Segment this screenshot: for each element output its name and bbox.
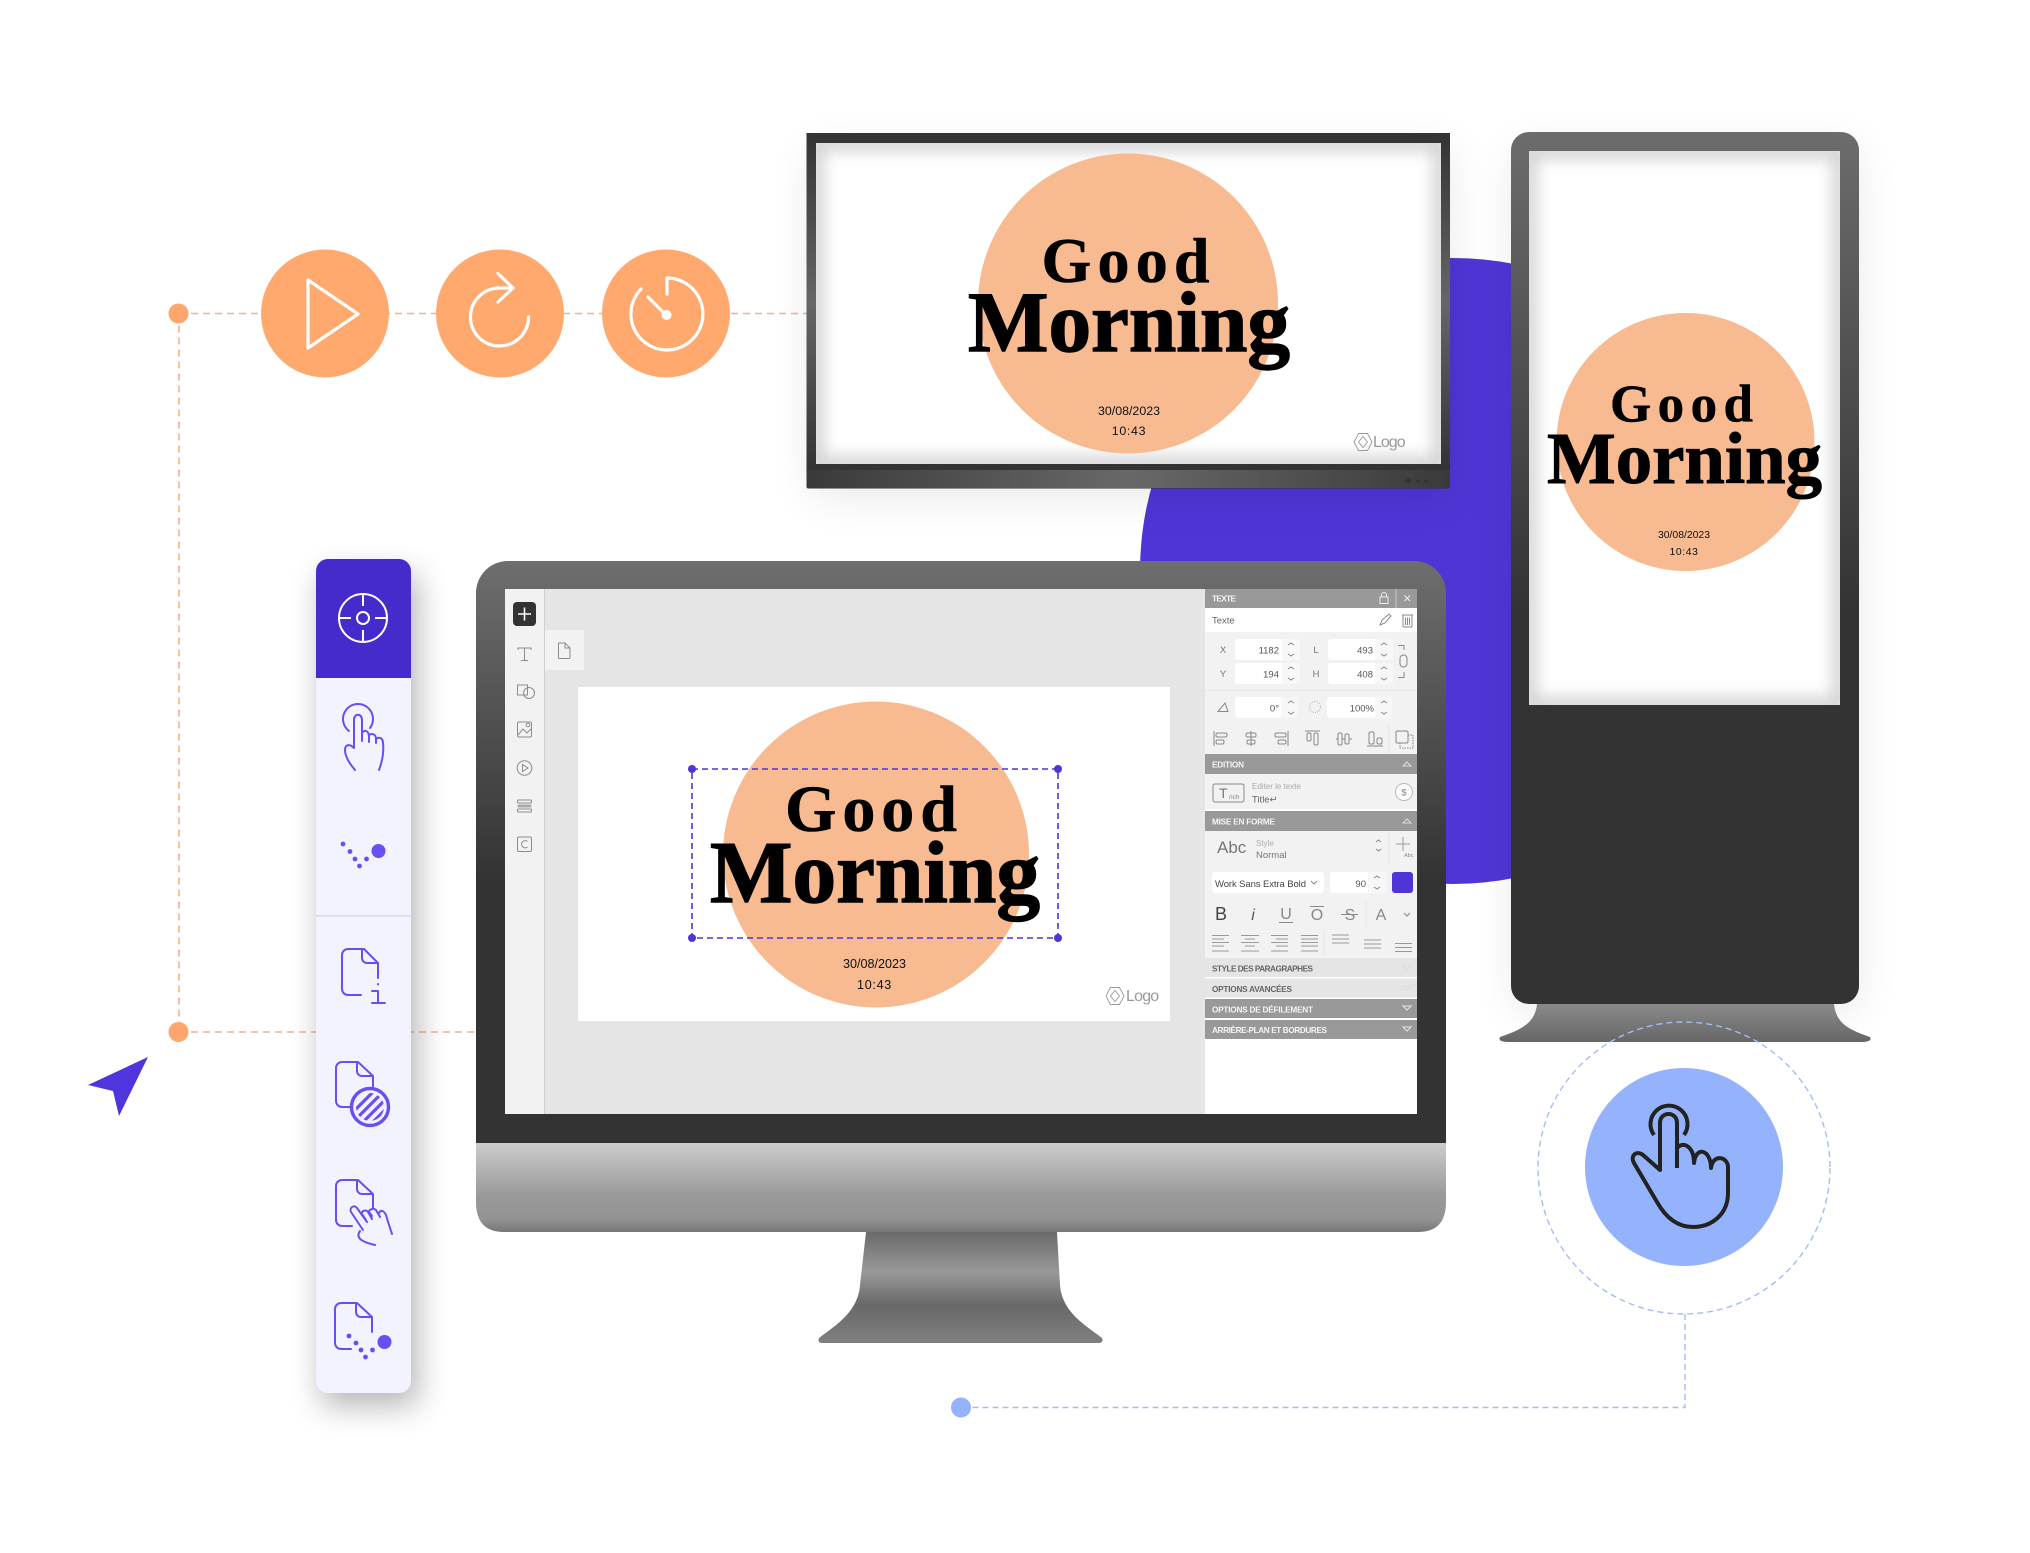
icon: touch hand (343, 704, 383, 770)
page tab (545, 630, 584, 670)
row: edit text: Title↵ (1252, 794, 1278, 806)
selection box (688, 765, 1062, 942)
monitor stand (818, 1232, 1102, 1343)
purple background circle (1140, 258, 1766, 884)
row: edit text: Editer le texte (1252, 782, 1301, 791)
kiosk headline: Morning (1547, 418, 1822, 499)
kiosk date and time (1658, 530, 1710, 558)
tv date and time: 30/08/2023 (1098, 404, 1160, 418)
sidebar panel (316, 678, 411, 1393)
tool: layers (518, 800, 532, 812)
kiosk date and time: 10:43 (1669, 547, 1699, 558)
row: edit text: rich (1229, 794, 1240, 801)
kiosk date and time: 30/08/2023 (1658, 530, 1710, 541)
row: character style: A (1376, 907, 1387, 924)
canvas logo (1106, 988, 1159, 1005)
fields: position and size (1220, 639, 1407, 684)
canvas headline (710, 773, 1040, 922)
collapsed section: options de defilement: OPTIONS DE DÉFILEMENT (1212, 1004, 1313, 1014)
shadow: devices (812, 150, 1856, 1010)
tv peach circle (978, 154, 1278, 454)
canvas headline: Good (785, 773, 957, 846)
connector dots: orange (168, 304, 188, 1042)
fields: position and size: 1182 (1259, 646, 1279, 656)
collapsed section: options de defilement (1205, 999, 1417, 1018)
monitor bezel (476, 561, 1446, 1143)
icon: file hatched (336, 1062, 390, 1126)
tool sidebar (316, 559, 411, 1393)
header: texte (1205, 589, 1417, 608)
shadow: sidebar (322, 575, 417, 1405)
row: edit text (1213, 782, 1412, 806)
tv date and time: 10:43 (1112, 424, 1146, 438)
connector: orange dashed lines (179, 314, 807, 1032)
sidebar active tab (316, 559, 411, 678)
row: font selector: Work Sans Extra Bold (1215, 879, 1306, 890)
canvas date and time (843, 957, 906, 992)
icon: motion dots (341, 842, 386, 868)
header: edition (1205, 754, 1417, 774)
divider (316, 915, 411, 916)
row: character style: B (1215, 904, 1227, 924)
row: alignment tools (1214, 724, 1413, 754)
fields: position and size: L (1313, 645, 1319, 656)
icon: repeat in orange circle (436, 250, 564, 378)
kiosk headline: Good (1610, 376, 1753, 434)
kiosk headline (1547, 376, 1822, 499)
row: character style: O (1311, 907, 1323, 924)
canvas headline: Morning (710, 825, 1040, 922)
row: font selector (1212, 872, 1413, 893)
row: character style: S (1345, 907, 1355, 924)
landscape wall screen (806, 133, 1450, 488)
kiosk peach circle (1556, 313, 1814, 571)
properties panel (1205, 589, 1417, 1114)
kiosk base (1499, 1004, 1871, 1042)
tool: counter (518, 837, 532, 852)
tv frame (806, 133, 1450, 470)
slide canvas (578, 687, 1170, 1021)
collapsed section: options avancees (1205, 978, 1417, 998)
fields: position and size: 493 (1357, 646, 1373, 656)
monitor silver chin (476, 1142, 1446, 1232)
monitor screen (505, 589, 1417, 1114)
collapsed section: arriere-plan et bordures: ARRIÈRE-PLAN ET BORDURES (1212, 1025, 1328, 1035)
row: style selector: Normal (1256, 850, 1287, 861)
collapsed section: options avancees: OPTIONS AVANCÉES (1212, 984, 1293, 994)
tool: add button (513, 602, 536, 626)
row: texte name: Texte (1212, 616, 1235, 626)
canvas date and time: 30/08/2023 (843, 957, 906, 971)
row: character style: U (1280, 906, 1292, 923)
row: character style: i (1251, 907, 1255, 924)
row: character style (1215, 900, 1410, 928)
tool: shapes (518, 685, 534, 698)
icon: blue touch hand (1585, 1068, 1783, 1266)
monitor lower black band (476, 1114, 1446, 1142)
header: texte: TEXTE (1212, 594, 1237, 604)
fields: rotation and opacity: 0° (1270, 704, 1279, 714)
fields: position and size: 408 (1357, 670, 1373, 680)
tv lower bar (806, 464, 1450, 488)
row: font selector: 90 (1355, 879, 1366, 890)
icon: target (339, 594, 387, 642)
collapsed section: arriere-plan et bordures (1205, 1020, 1417, 1039)
icon: file info (342, 949, 385, 1003)
connector dot: blue (951, 1398, 971, 1418)
collapsed section: style des paragraphes (1205, 958, 1417, 977)
icon: timer in orange circle (602, 250, 730, 378)
icon: file touch (336, 1180, 392, 1245)
kiosk body (1511, 132, 1859, 1004)
tv logo: Logo (1373, 434, 1406, 451)
left toolbar (505, 589, 545, 1114)
row: style selector (1217, 832, 1414, 864)
fields: rotation and opacity (1218, 697, 1392, 718)
fields: position and size: Y (1220, 669, 1227, 680)
fields: position and size: 194 (1263, 670, 1279, 680)
tv logo (1354, 434, 1406, 451)
row: style selector: Abc (1217, 838, 1247, 857)
tv headline (968, 225, 1290, 370)
icon: file motion (335, 1303, 392, 1359)
tv date and time (1098, 404, 1160, 438)
kiosk screen (1529, 151, 1840, 705)
row: style selector: Style (1256, 839, 1274, 848)
fields: rotation and opacity: 100% (1350, 704, 1375, 714)
header: edition: EDITION (1212, 760, 1244, 770)
fields: position and size: X (1220, 645, 1227, 656)
tv headline: Morning (968, 274, 1290, 370)
row: paragraph alignment (1212, 930, 1412, 956)
icon: play in orange circle (261, 250, 389, 378)
portrait kiosk totem (1499, 132, 1871, 1042)
connector: blue dashed ring and line (961, 1022, 1830, 1408)
header: mise en forme: MISE EN FORME (1212, 818, 1276, 826)
desktop monitor (476, 561, 1446, 1343)
row: edit text: T (1219, 785, 1228, 801)
tool: text (518, 648, 531, 660)
row: style selector: Abc (1404, 853, 1414, 859)
row: texte name (1212, 614, 1413, 627)
header: mise en forme (1205, 811, 1417, 831)
fields: position and size: H (1313, 669, 1320, 680)
row: edit text: $ (1401, 788, 1407, 798)
canvas peach circle (723, 702, 1029, 1008)
icon: paper plane arrow (88, 1057, 148, 1116)
tv screen (816, 143, 1441, 464)
tv headline: Good (1042, 225, 1210, 296)
canvas date and time: 10:43 (857, 978, 892, 992)
collapsed section: style des paragraphes: STYLE DES PARAGRAPHES (1212, 964, 1314, 974)
tool: media (517, 761, 532, 775)
tool: image (518, 722, 532, 737)
canvas logo: Logo (1126, 988, 1159, 1005)
